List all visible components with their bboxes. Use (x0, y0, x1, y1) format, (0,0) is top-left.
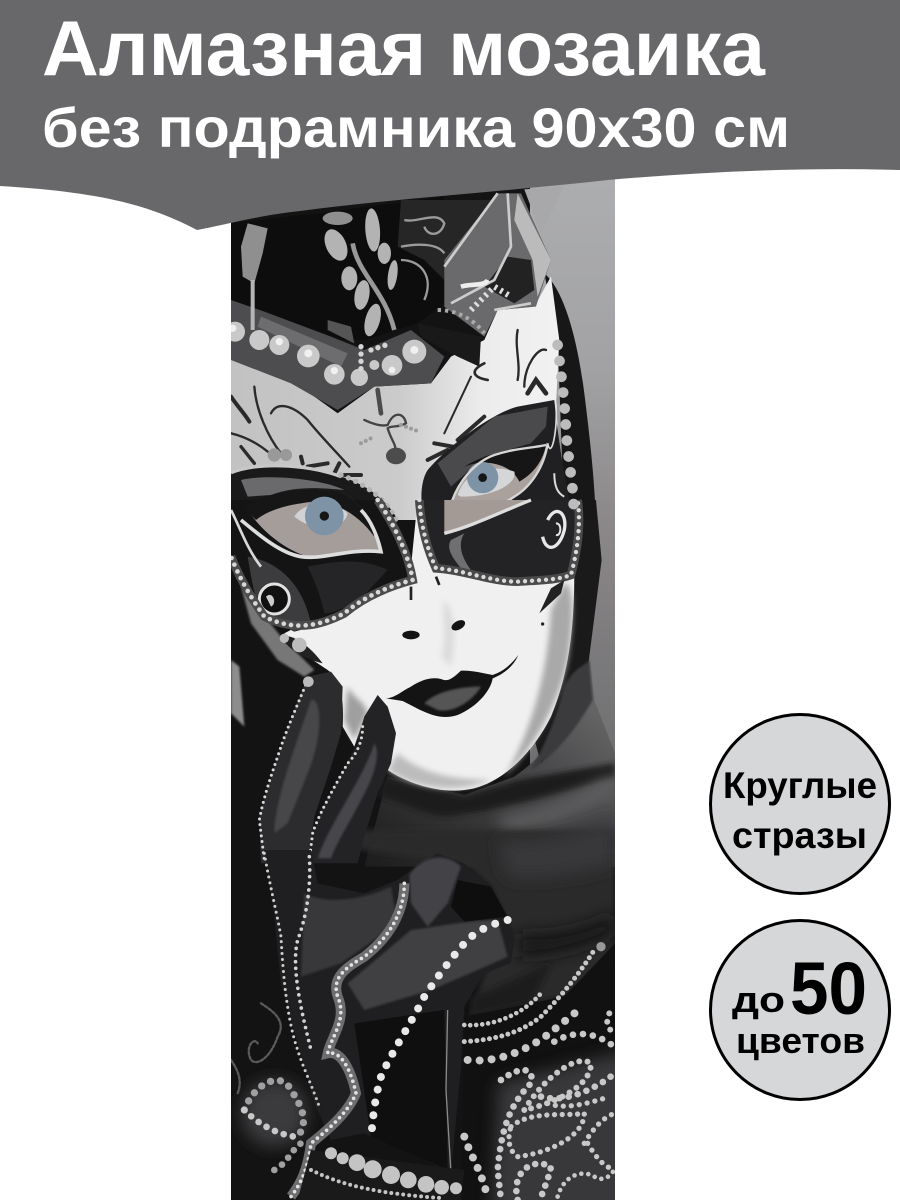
scarf behind hand (298, 817, 615, 1017)
subtitle: без подрамника 90х30 см (42, 96, 790, 159)
skin at top right (524, 186, 564, 233)
left ornament (241, 223, 268, 283)
hood band upper (544, 273, 596, 520)
badge: round rhinestones: Круглые (723, 765, 877, 806)
left eye patch (231, 466, 413, 663)
badge: up to 50 colours: 50 (790, 947, 867, 1030)
silver band with gems (231, 300, 444, 410)
badge: up to 50 colours (710, 920, 890, 1100)
right eye patch (411, 345, 581, 626)
hood and scarf (231, 500, 615, 867)
nose and lips (386, 618, 518, 717)
middle finger (306, 695, 396, 863)
photo: venetian mask portrait (231, 150, 615, 1200)
badge: up to 50 colours: цветов (736, 1020, 865, 1061)
index finger (259, 672, 343, 863)
badge: round rhinestones: стразы (732, 815, 867, 856)
badge: round rhinestones (710, 714, 890, 894)
header banner (0, 0, 900, 230)
central silver leaves (320, 208, 399, 338)
title: Алмазная мозаика (42, 4, 766, 92)
blurred street background (530, 150, 615, 770)
glove bead lines (264, 853, 319, 1107)
crown (444, 193, 551, 337)
white mask upper (231, 277, 566, 520)
right side rhinestones (558, 345, 574, 505)
black headband and top decoration (225, 186, 564, 410)
large gems at cuff (325, 1147, 462, 1195)
hand body (264, 850, 514, 1197)
badge: up to 50 colours: до (732, 979, 785, 1020)
white mask lower (284, 500, 578, 791)
embroidered sleeve and dress (231, 942, 631, 1200)
gloved hand (259, 672, 514, 1197)
